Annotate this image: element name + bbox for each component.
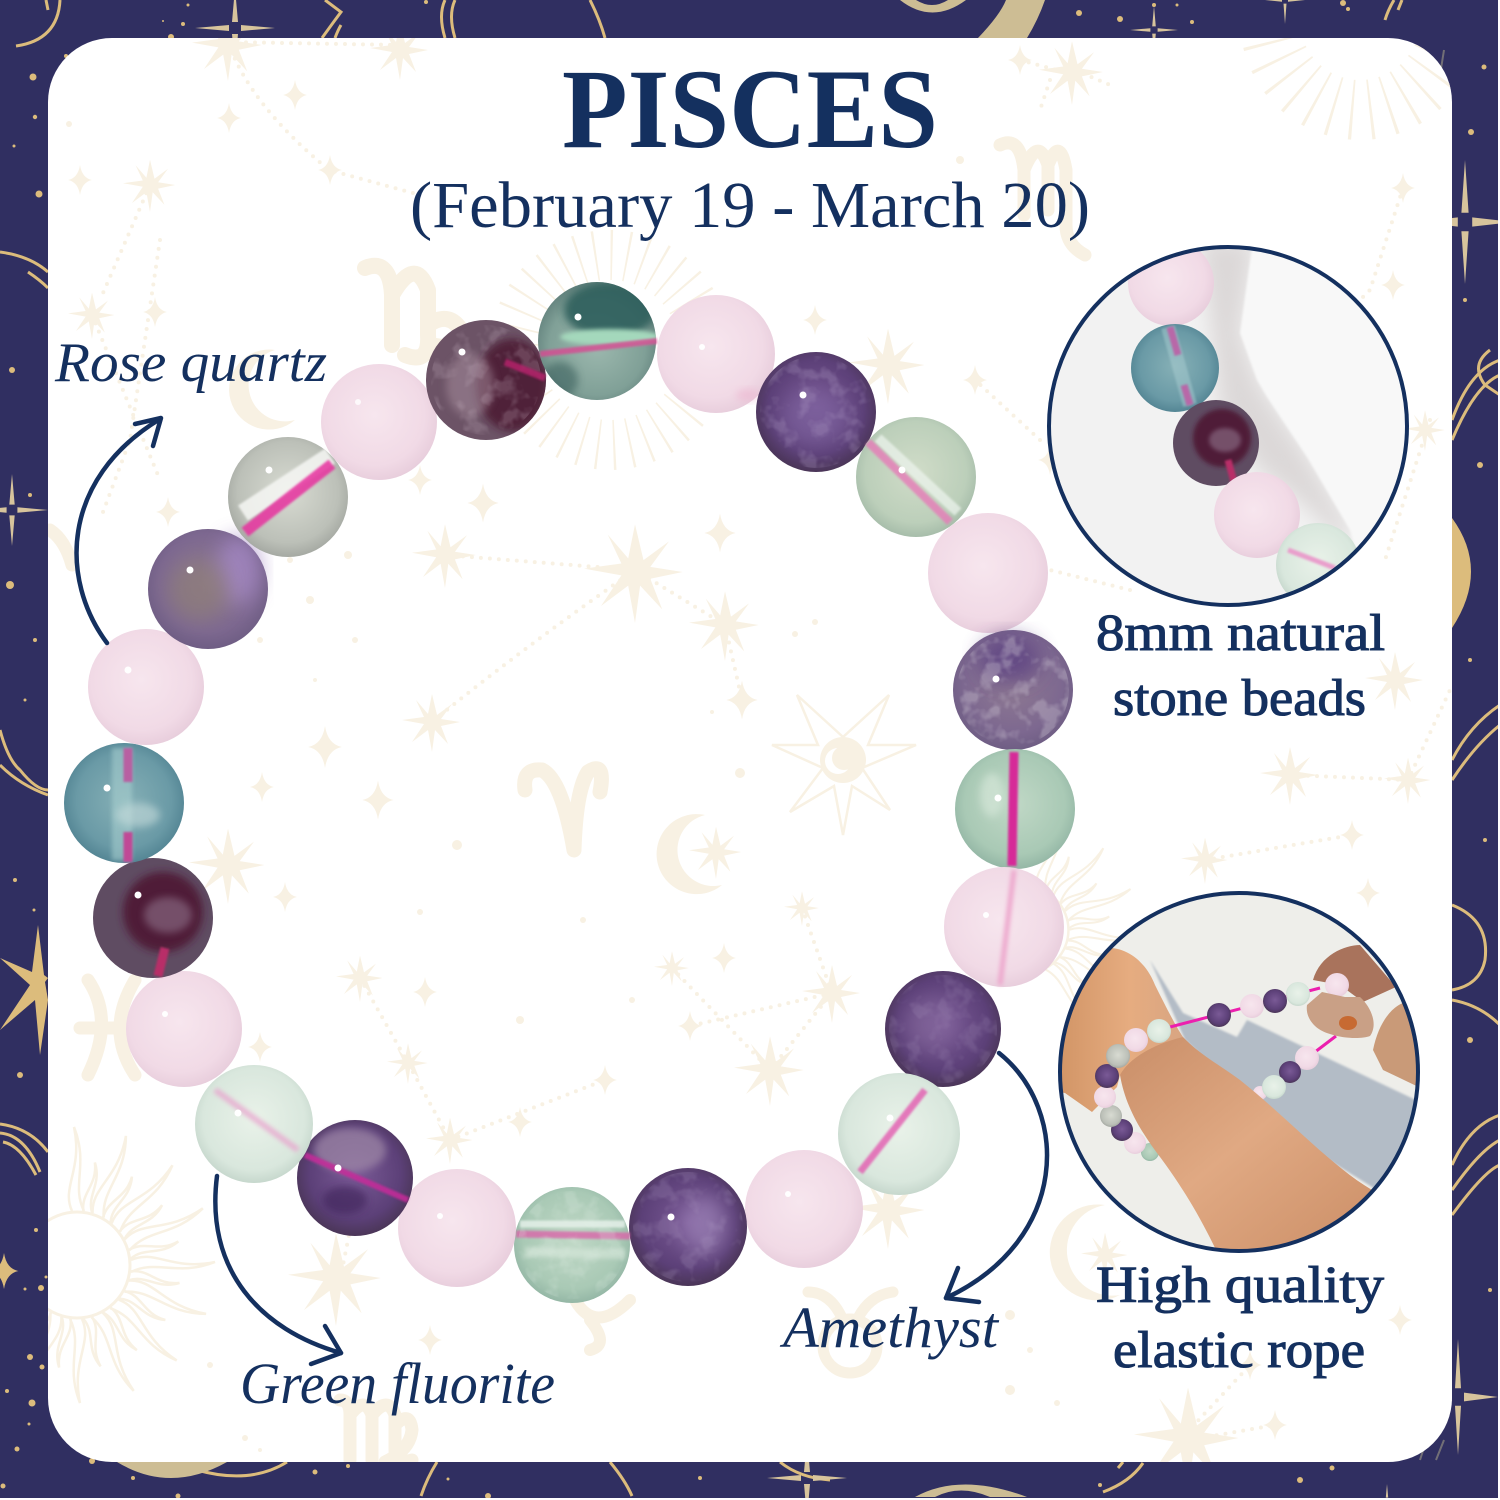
arrow: to Amethyst [946,1053,1047,1302]
shadow on fabric [1200,240,1350,545]
zodiac signs [50,143,1085,1462]
caption: bead size: stone beads [1113,670,1366,727]
bead: grey-green fluorite [228,437,348,557]
wavy sun, behind right beads [1036,848,1131,1003]
bead: rose quartz [1128,252,1214,326]
caption: elastic rope [1096,1257,1384,1379]
arrow: to Green fluorite [215,1176,341,1364]
thumb [1307,992,1374,1038]
bead: rose quartz [1214,472,1300,558]
subtitle: dates: (February 19 - March 20) [410,169,1090,242]
bead: pale fluorite [1276,523,1356,593]
arrow: to Rose quartz [77,418,161,643]
bead: dark amethyst [1173,400,1259,486]
bead: dark amethyst [93,858,213,978]
hand [1050,948,1183,1112]
bead: amethyst [297,1120,413,1236]
bracelet [64,282,1075,1303]
bead: amethyst [756,352,876,472]
finger, right [1373,1004,1416,1086]
bead: green fluorite [955,749,1075,869]
photo: wrist with elastic rope [1050,893,1425,1265]
caption: bead size [1096,605,1385,727]
label: Green fluorite: Green fluorite [240,1351,555,1416]
bead: green fluorite [514,1187,630,1303]
small bead pinched in fingers [1325,973,1349,997]
wavy sun, lower left [48,1126,216,1404]
bead: rose quartz [928,513,1048,633]
bead: rose quartz [126,971,242,1087]
bead: rose quartz [398,1169,516,1287]
beads hidden behind the arm [1094,1044,1267,1161]
label: Amethyst: Amethyst [779,1295,1000,1360]
bead: amethyst [953,630,1073,750]
title: PISCES [562,47,938,172]
label: Rose quartz: Rose quartz [54,332,327,394]
small beads on the rope [1124,982,1319,1099]
bead: rose quartz [88,629,204,745]
bead: rose quartz [657,295,775,413]
rope [1170,986,1337,1052]
bead: pale green fluorite [195,1065,313,1183]
bead: amethyst [885,971,1001,1087]
photo: bead close-up [1049,240,1420,607]
caption: bead size: 8mm natural [1096,605,1385,662]
bead: light amethyst [148,529,268,649]
bead: teal fluorite [64,743,184,863]
sun with crescent [772,695,916,835]
wall shadow [1150,960,1420,1190]
bead: amethyst [629,1168,747,1286]
bead: teal fluorite [1131,324,1219,412]
caption: elastic rope: elastic rope [1113,1322,1365,1379]
bead: dark amethyst [426,320,548,440]
bead: teal-green fluorite [538,282,660,400]
bead: pale green fluorite [838,1073,960,1195]
bead: rose quartz [321,364,437,480]
forearm [1120,1037,1372,1249]
bead: rose quartz [745,1150,863,1268]
bright lace fabric [1240,251,1360,543]
bead: rose quartz [944,867,1064,987]
caption: elastic rope: High quality [1096,1257,1384,1314]
fingers holding the bracelet [1313,945,1396,1002]
sun rays, top right corner [1270,0,1450,110]
bead: sage green fluorite [856,417,976,537]
sun rays behind top of bracelet [515,255,705,445]
